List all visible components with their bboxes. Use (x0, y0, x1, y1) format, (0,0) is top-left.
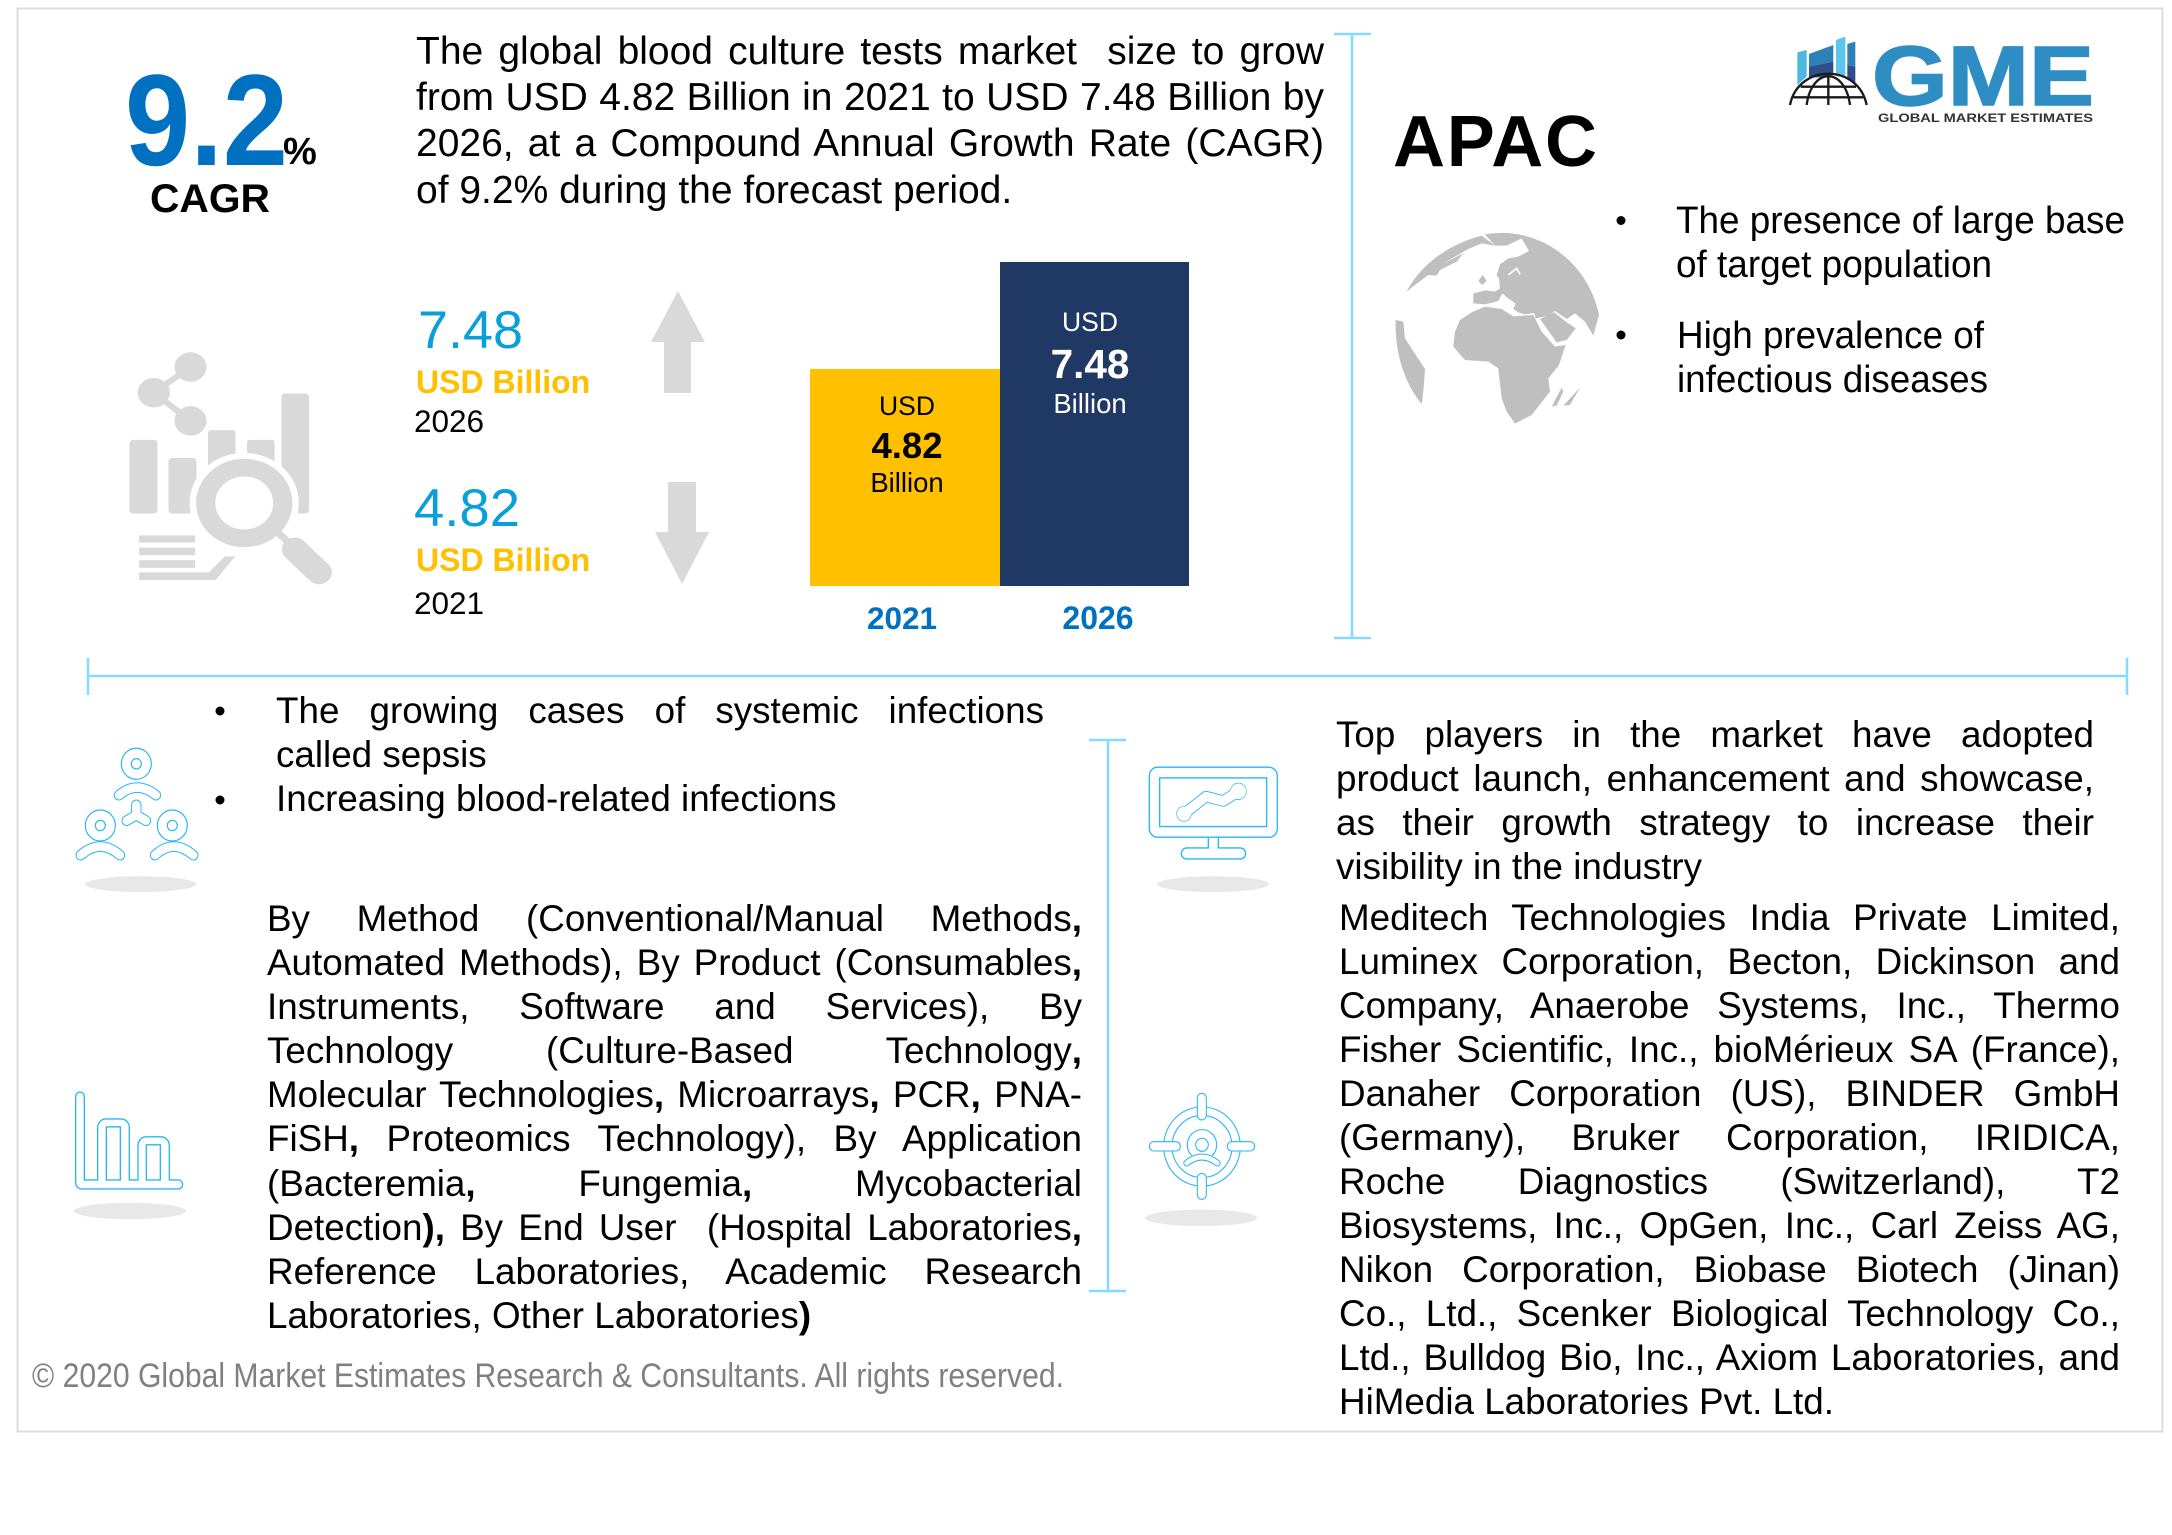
logo: GME: GME (1872, 29, 2094, 123)
2021 value: 4.82 (414, 479, 520, 538)
bar chart: 2026 (1062, 600, 1134, 636)
segments text: Molecular Technologies, Microarrays, PCR, PNA- (267, 1074, 1082, 1115)
segments text: By Method (Conventional/Manual Methods, (267, 898, 1082, 939)
segments text: Detection), By End User (Hospital Laboratories, (267, 1207, 1082, 1248)
summary paragraph: 2026, at a Compound Annual Growth Rate (CAGR) (416, 122, 1324, 165)
icon: people network (81, 748, 196, 892)
bar chart: 4.82 (871, 425, 943, 466)
segments text (267, 898, 1082, 1336)
2026 value (414, 301, 590, 439)
2026 value: USD Billion (416, 364, 590, 400)
segments text: Reference Laboratories, Academic Research (267, 1251, 1082, 1292)
APAC heading: APAC (1393, 102, 1597, 182)
key companies text: Co., Ltd., Scenker Biological Technology Co., (1339, 1293, 2120, 1334)
growth drivers text (276, 690, 1044, 819)
icon: target with person (1145, 1093, 1257, 1226)
key companies text: Nikon Corporation, Biobase Biotech (Jinan) (1339, 1249, 2120, 1290)
icon: column chart (74, 1092, 186, 1219)
icon: monitor with trend line (1149, 767, 1277, 892)
key companies text: HiMedia Laboratories Pvt. Ltd. (1339, 1381, 1834, 1422)
summary paragraph: from USD 4.82 Billion in 2021 to USD 7.48 Billion by (416, 76, 1324, 119)
key companies text (1339, 897, 2120, 1422)
growth strategy text: visibility in the industry (1336, 846, 1702, 887)
growth drivers text: Increasing blood-related infections (276, 778, 836, 819)
summary paragraph: of 9.2% during the forecast period. (416, 169, 1012, 212)
key companies text: Biosystems, Inc., OpGen, Inc., Carl Zeiss AG, (1339, 1205, 2120, 1246)
APAC drivers: of target population (1676, 243, 1992, 286)
logo: GME (1790, 29, 2094, 125)
2021 value: 2021 (414, 585, 484, 621)
summary paragraph: The global blood culture tests market size to grow (416, 30, 1324, 72)
2026 value: 7.48 (418, 301, 523, 360)
CAGR callout: % (283, 131, 317, 173)
CAGR callout: 9.2 (125, 47, 288, 193)
summary paragraph (416, 30, 1324, 212)
APAC drivers: High prevalence of (1677, 314, 1984, 357)
bar chart: Billion (870, 467, 944, 498)
bar chart: 2021 (867, 600, 937, 636)
APAC drivers: infectious diseases (1677, 358, 1988, 401)
growth drivers text: called sepsis (276, 734, 487, 775)
bar chart (810, 262, 1189, 636)
CAGR callout: CAGR (150, 177, 270, 221)
key companies text: (Germany), Bruker Corporation, IRIDICA, (1339, 1117, 2120, 1158)
key companies text: Luminex Corporation, Becton, Dickinson and (1339, 941, 2120, 982)
bar chart: USD (879, 391, 935, 421)
key companies text: Danaher Corporation (US), BINDER GmbH (1339, 1073, 2120, 1114)
segments text: Technology (Culture-Based Technology, (267, 1030, 1082, 1071)
segments text: (Bacteremia, Fungemia, Mycobacterial (267, 1163, 1082, 1204)
segments text: Automated Methods), By Product (Consumables, (267, 942, 1082, 983)
bar chart: USD (1062, 307, 1118, 337)
segments text: Instruments, Software and Services), By (267, 986, 1082, 1027)
growth strategy text: Top players in the market have adopted (1336, 714, 2094, 755)
growth strategy text: as their growth strategy to increase their (1336, 802, 2094, 843)
left bullets (216, 706, 224, 804)
growth drivers text: The growing cases of systemic infections (276, 690, 1044, 731)
2021 value (414, 479, 590, 621)
key companies text: Fisher Scientific, Inc., bioMérieux SA (France), (1339, 1029, 2120, 1070)
segments text: Laboratories, Other Laboratories) (267, 1295, 811, 1336)
copyright: © 2020 Global Market Estimates Research & Consultants. All rights reserved. (32, 1357, 1064, 1395)
icon: globe (1396, 233, 1599, 424)
growth strategy text: product launch, enhancement and showcase, (1336, 758, 2094, 799)
segments text: FiSH, Proteomics Technology), By Application (267, 1118, 1082, 1159)
growth strategy text (1336, 714, 2094, 887)
key companies text: Meditech Technologies India Private Limited, (1339, 897, 2120, 938)
APAC drivers (1616, 199, 2125, 401)
key companies text: Roche Diagnostics (Switzerland), T2 (1339, 1161, 2120, 1202)
key companies text: Company, Anaerobe Systems, Inc., Thermo (1339, 985, 2120, 1026)
arrow up (651, 291, 705, 393)
2026 value: 2026 (414, 403, 484, 439)
icon: magnifier over bar chart (129, 352, 319, 580)
logo: GME: GLOBAL MARKET ESTIMATES (1878, 113, 2093, 125)
APAC drivers: The presence of large base (1676, 199, 2125, 242)
2021 value: USD Billion (416, 542, 590, 578)
bar chart: 7.48 (1051, 341, 1129, 387)
arrow down (655, 482, 709, 584)
bar chart: Billion (1053, 388, 1127, 419)
key companies text: Ltd., Bulldog Bio, Inc., Axiom Laboratories, and (1339, 1337, 2120, 1378)
